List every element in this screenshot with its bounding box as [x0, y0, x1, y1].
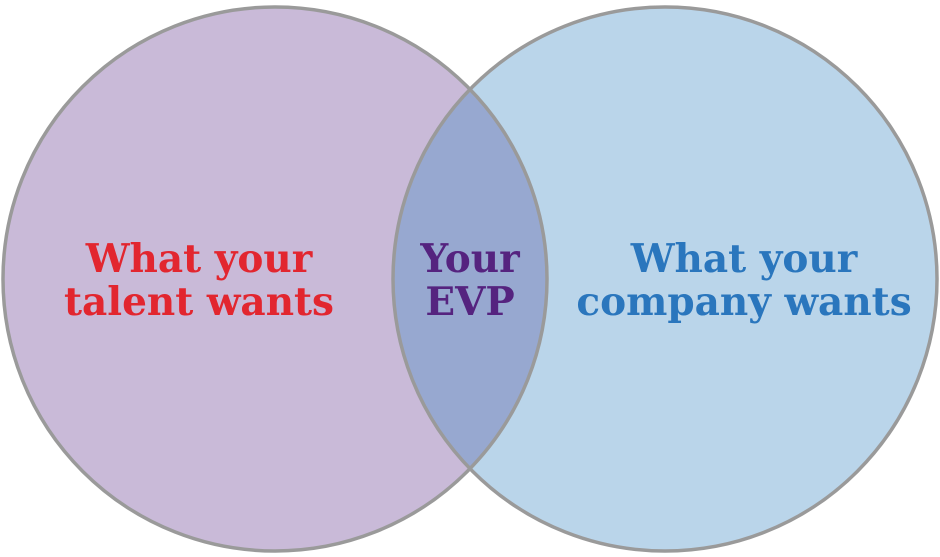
label: your EVP: Your — [419, 236, 520, 282]
circle: talent — [3, 7, 547, 551]
overlap: EVP — [394, 92, 546, 466]
label: your EVP — [419, 236, 520, 325]
label: your EVP: EVP — [425, 279, 515, 325]
label: company wants: company wants — [576, 279, 912, 325]
label: company wants — [576, 236, 912, 325]
label: talent wants — [64, 236, 334, 325]
label: company wants: What your — [630, 236, 858, 282]
circle: company — [393, 7, 937, 551]
label: talent wants: talent wants — [64, 279, 334, 325]
label: talent wants: What your — [85, 236, 313, 282]
